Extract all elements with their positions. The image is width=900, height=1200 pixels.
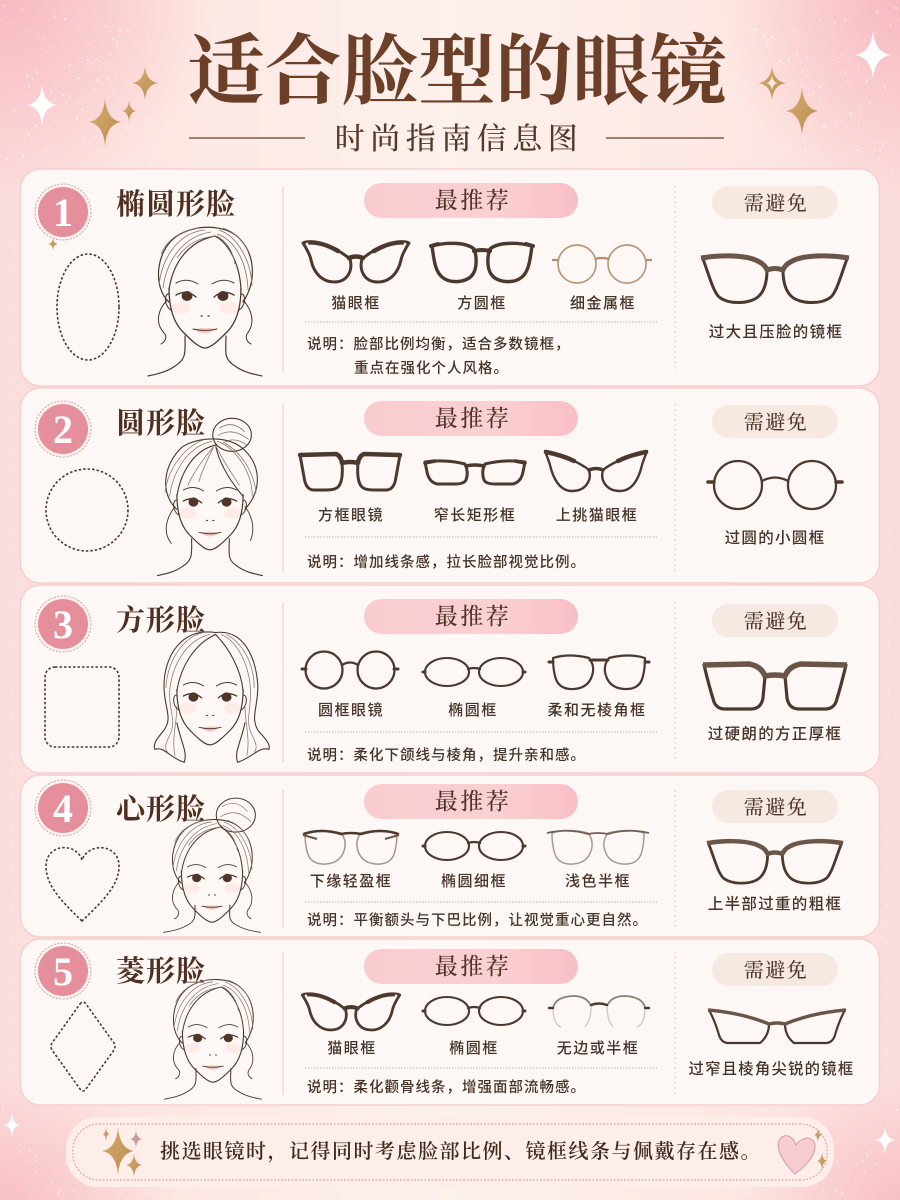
description: 说明：柔化颧骨线条，增强面部流畅感。 (307, 1078, 586, 1096)
heading: 方形脸 (116, 604, 206, 637)
labels: 细金属框 (570, 294, 636, 312)
avoid pill (712, 604, 838, 637)
heart icon (778, 1128, 827, 1174)
labels: 椭圆细框 (441, 873, 507, 890)
labels: 方圆框 (457, 294, 507, 312)
glasses: cat-eye (303, 242, 409, 282)
heading: 圆形脸 (116, 407, 206, 440)
avoid label: 上半部过重的粗框 (708, 895, 842, 913)
recommended pill: 最推荐 (435, 954, 511, 979)
avoid glasses (708, 1010, 846, 1043)
avoid label: 过硬朗的方正厚框 (708, 724, 842, 743)
square outline (45, 667, 119, 747)
number badge: 5 (53, 949, 73, 994)
labels: 椭圆框 (448, 702, 498, 719)
face illustration (164, 798, 260, 932)
gold sparkles left (89, 66, 158, 146)
labels (310, 873, 631, 890)
number badge (35, 401, 91, 457)
labels: 圆框眼镜 (318, 701, 384, 719)
diamond outline (51, 1002, 115, 1091)
avoid pill (712, 186, 838, 219)
labels: 窄长矩形框 (434, 506, 516, 524)
labels: 猫眼框 (327, 1040, 377, 1057)
recommended pill: 最推荐 (435, 406, 511, 431)
avoid pill (712, 405, 838, 438)
glasses: round (302, 652, 398, 688)
labels: 椭圆框 (449, 1040, 499, 1057)
avoid glasses (707, 841, 843, 883)
labels: 方框眼镜 (318, 506, 384, 524)
heading: 椭圆形脸 (116, 188, 236, 221)
number badge: 4 (53, 786, 73, 831)
heart outline (46, 848, 119, 921)
description (307, 335, 570, 377)
title: 适合脸型的眼镜 (188, 29, 726, 115)
avoid pill (712, 790, 838, 823)
avoid label: 过圆的小圆框 (725, 529, 825, 547)
description: 说明：柔化下颌线与棱角，提升亲和感。 (307, 747, 586, 764)
glasses: rounded square (431, 243, 533, 282)
glasses: soft rimless (549, 656, 649, 689)
avoid glasses (708, 461, 842, 509)
glasses: upswept cat-eye (545, 451, 647, 491)
number badge: 1 (53, 190, 73, 235)
recommended pill: 最推荐 (435, 604, 511, 629)
description: 说明：平衡额头与下巴比例，让视觉重心更自然。 (307, 911, 648, 929)
labels: 浅色半框 (565, 873, 631, 890)
description: 说明：脸部比例均衡，适合多数镜框， (307, 335, 570, 353)
recommended pill (364, 599, 578, 634)
avoid pill: 需避免 (744, 411, 808, 434)
panel 4: heart face (20, 775, 880, 937)
tip text: 挑选眼镜时，记得同时考虑脸部比例、镜框线条与佩戴存在感。 (160, 1139, 762, 1163)
labels (318, 701, 647, 719)
oval outline (57, 254, 119, 360)
number badge (35, 184, 91, 250)
number badge (35, 943, 91, 999)
sparkles icon (102, 1127, 142, 1177)
labels: 柔和无棱角框 (547, 702, 647, 719)
glasses: thin oval (423, 832, 525, 860)
labels: 下缘轻盈框 (310, 873, 392, 890)
number badge (35, 780, 91, 836)
labels: 猫眼框 (331, 295, 381, 312)
glasses: half rim (549, 996, 649, 1027)
labels (318, 506, 638, 524)
recommended pill (364, 949, 578, 984)
subtitle: 时尚指南信息图 (335, 123, 583, 156)
face illustration (165, 980, 261, 1099)
labels: 无边或半框 (557, 1040, 639, 1057)
avoid pill: 需避免 (744, 610, 808, 633)
banner background (66, 1117, 834, 1187)
labels (327, 1040, 639, 1057)
recommended pill: 最推荐 (435, 789, 511, 814)
gold sparkles right (758, 66, 818, 135)
avoid pill: 需避免 (744, 796, 808, 819)
labels (331, 294, 636, 312)
card (20, 775, 880, 937)
circle outline (46, 469, 128, 551)
heading: 菱形脸 (116, 955, 206, 988)
panel 3: square face (20, 585, 880, 773)
avoid pill: 需避免 (744, 959, 808, 982)
recommended pill: 最推荐 (435, 188, 511, 213)
panel 2: round face (20, 388, 880, 583)
recommended pill (364, 401, 578, 436)
recommended pill (364, 784, 578, 819)
card (20, 388, 880, 583)
card (20, 585, 880, 773)
glasses: oval (423, 658, 525, 686)
face illustration (158, 418, 262, 576)
face illustration (154, 632, 269, 762)
number badge: 3 (53, 602, 73, 647)
glasses: cat-eye (302, 994, 400, 1030)
card (20, 939, 880, 1105)
card (20, 169, 880, 386)
panel 5: diamond face (20, 939, 880, 1105)
footer tip banner (66, 1117, 834, 1187)
avoid pill: 需避免 (744, 192, 808, 215)
description: 重点在强化个人风格。 (354, 360, 509, 377)
glasses: light half frame (547, 830, 649, 864)
recommended pill (364, 183, 578, 218)
glasses: thin metal (552, 245, 652, 283)
avoid glasses (701, 256, 849, 303)
avoid pill (712, 953, 838, 986)
avoid glasses (703, 664, 847, 709)
glasses: square (300, 454, 400, 490)
glasses: narrow rectangle (425, 461, 525, 484)
avoid label: 过大且压脸的镜框 (709, 322, 843, 341)
number badge (35, 596, 91, 652)
avoid label: 过窄且棱角尖锐的镜框 (689, 1060, 854, 1078)
description: 说明：增加线条感，拉长脸部视觉比例。 (307, 553, 586, 571)
panel 1: oval face (20, 169, 880, 386)
glasses: oval (423, 997, 525, 1025)
number badge: 2 (53, 407, 73, 452)
heading: 心形脸 (116, 793, 206, 826)
glasses: light lower rim (303, 830, 399, 864)
labels: 上挑猫眼框 (556, 507, 638, 524)
face illustration (148, 227, 262, 376)
